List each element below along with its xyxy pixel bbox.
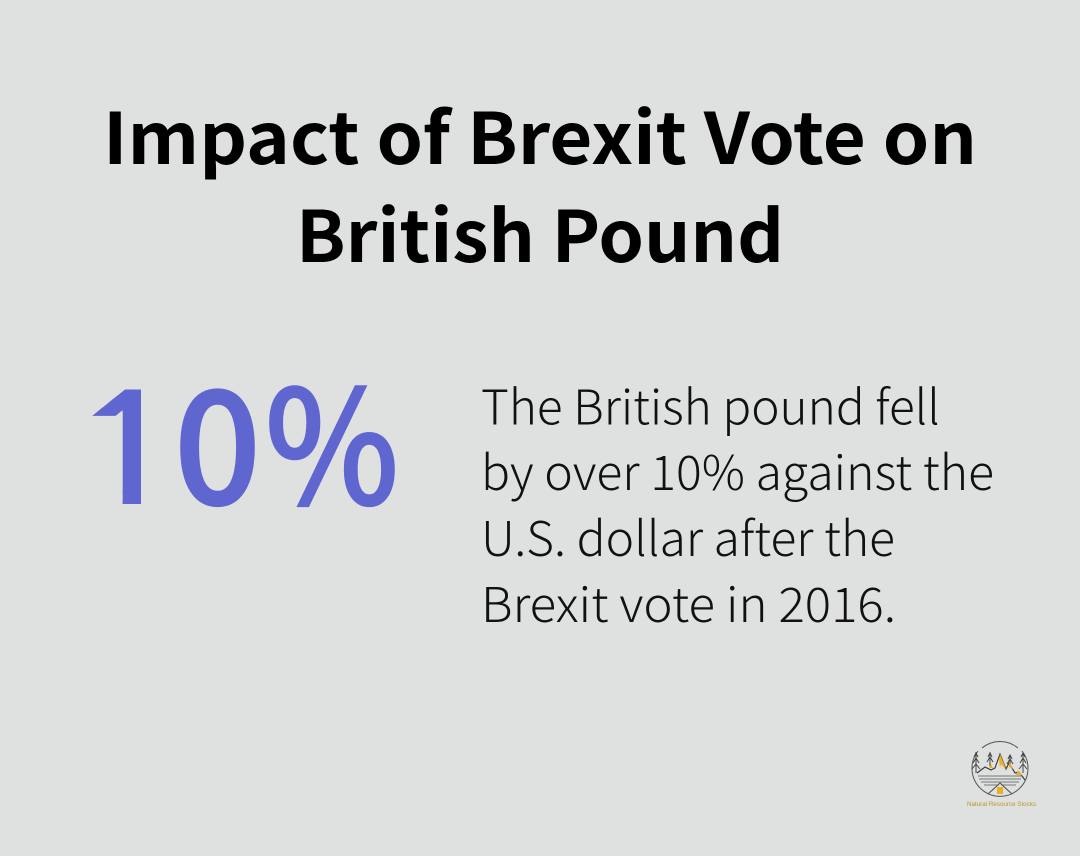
description text	[481, 368, 994, 636]
title	[103, 83, 977, 283]
logo water lines	[978, 776, 1022, 785]
logo mountains	[977, 754, 1025, 780]
title: Impact of Brexit Vote on	[103, 83, 977, 185]
description text: U.S. dollar after the	[481, 500, 895, 570]
description text: The British pound fell	[481, 368, 940, 438]
big statistic: 10%: %	[265, 323, 399, 550]
big statistic: 10%: 1	[75, 323, 187, 550]
title: British Pound	[296, 181, 784, 283]
logo caption: Natural Resource Stocks	[967, 801, 1037, 808]
description text: by over 10% against the	[481, 434, 994, 504]
description text: Brexit vote in 2016.	[481, 566, 896, 636]
logo hut	[988, 783, 1012, 794]
big statistic: 10%: 0	[174, 323, 261, 550]
logo: Natural Resource Stocks	[967, 741, 1037, 808]
logo trees	[972, 752, 1027, 773]
big statistic: 10%	[92, 385, 395, 508]
infographic canvas	[92, 106, 1036, 806]
logo circle	[972, 741, 1028, 796]
